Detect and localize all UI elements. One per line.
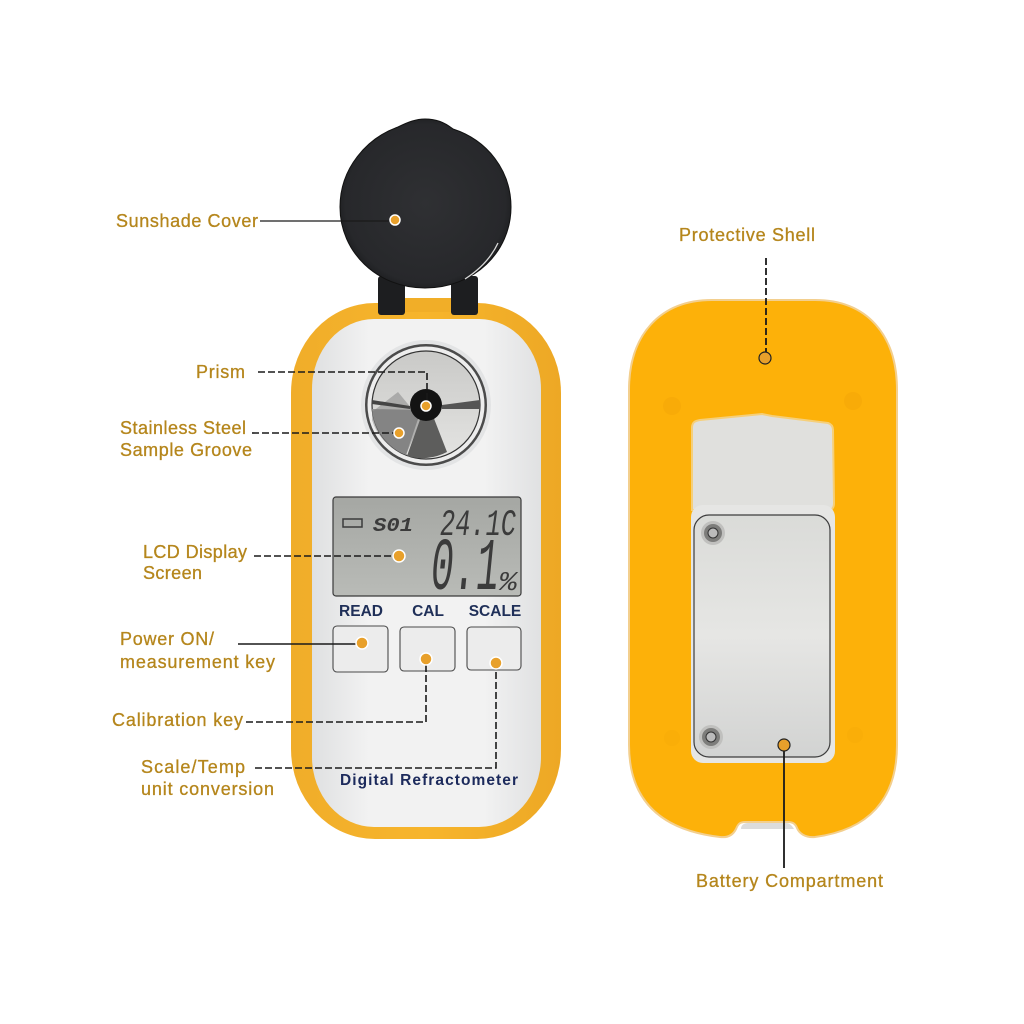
upper back plate	[692, 414, 834, 510]
label: stainless steel sample groove: Stainless Steel	[120, 418, 246, 438]
LCD temperature readout: 24.1C	[440, 505, 516, 547]
back device	[629, 300, 897, 837]
icon: battery	[343, 519, 362, 527]
key labels: CAL	[412, 603, 444, 620]
protective shell	[629, 300, 897, 837]
leader lines	[238, 221, 784, 868]
label: power key	[120, 629, 275, 672]
LCD main reading: 0.1	[431, 528, 499, 612]
key labels: READ	[339, 603, 383, 620]
label: stainless steel sample groove	[120, 418, 252, 460]
key labels: SCALE	[469, 603, 521, 620]
marker dots	[356, 215, 790, 751]
product name: Digital Refractometer	[340, 772, 518, 789]
LCD percent sign: %	[498, 569, 519, 599]
icon: bottom screw	[699, 725, 723, 749]
key labels	[339, 603, 521, 620]
label: protective shell: Protective Shell	[679, 225, 815, 245]
battery compartment	[694, 515, 830, 757]
mid back plate	[691, 505, 835, 763]
label: LCD display screen: LCD Display	[143, 542, 247, 562]
label: power key: measurement key	[120, 652, 275, 672]
label: scale/temp	[141, 757, 274, 799]
callout labels	[112, 211, 883, 891]
label: calibration key: Calibration key	[112, 710, 243, 730]
front device	[291, 119, 561, 839]
label: scale/temp: unit conversion	[141, 779, 274, 799]
keys	[333, 626, 521, 672]
label: LCD display screen	[143, 542, 247, 583]
label: battery compartment: Battery Compartment	[696, 871, 883, 891]
label: sunshade cover: Sunshade Cover	[116, 211, 258, 231]
protective rim	[291, 303, 561, 839]
white faceplate	[312, 319, 541, 827]
label: prism: Prism	[196, 362, 245, 382]
lower notch	[741, 823, 794, 829]
label: LCD display screen: Screen	[143, 563, 202, 583]
LCD screen	[333, 497, 521, 612]
icon: sunshade cover	[340, 119, 511, 315]
label: stainless steel sample groove: Sample Groove	[120, 440, 252, 460]
icon: prism and stainless steel sample groove	[361, 340, 491, 470]
label: power key: Power ON/	[120, 629, 214, 649]
LCD scale readout: S01	[373, 515, 413, 537]
shell bumps	[663, 392, 863, 746]
icon: top screw	[701, 521, 725, 545]
label: scale/temp: Scale/Temp	[141, 757, 245, 777]
